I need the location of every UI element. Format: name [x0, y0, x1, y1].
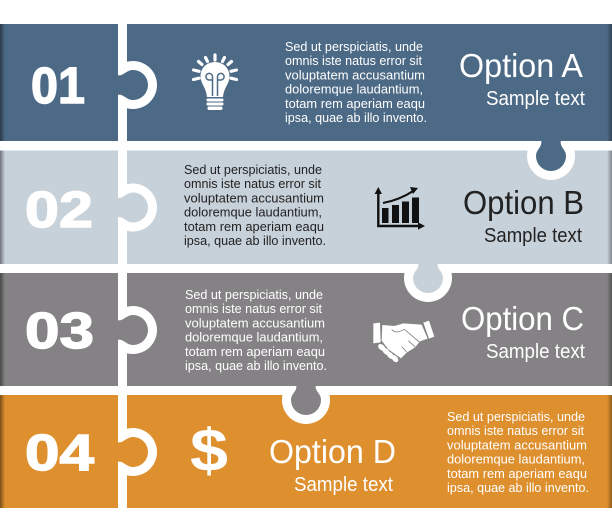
text block D: totam rem aperiam eaqu	[447, 467, 587, 481]
text block C: ipsa, quae ab illo invento.	[185, 359, 327, 373]
text block C	[185, 288, 327, 373]
text block D: omnis iste natus error sit	[447, 424, 584, 438]
subheading: Sample text: Sample text	[486, 340, 585, 363]
content cell A	[127, 24, 612, 141]
puzzle connector down to row 02	[527, 141, 575, 180]
text block C: omnis iste natus error sit	[185, 302, 322, 316]
text block C: Sed ut perspiciatis, unde	[185, 288, 323, 302]
heading: Option C: Option C	[461, 300, 584, 337]
text block A: ipsa, quae ab illo invento.	[285, 111, 427, 125]
text block C: doloremque laudantium,	[185, 331, 323, 345]
puzzle connector down to row 03	[404, 264, 452, 302]
puzzle connector 04	[118, 428, 157, 476]
text block B	[184, 163, 326, 248]
puzzle connector 01	[118, 61, 157, 109]
text block B: voluptatem accusantium	[184, 191, 324, 205]
number 01: 01	[31, 57, 85, 114]
text block D	[447, 410, 589, 495]
text block C: voluptatem accusantium	[185, 316, 325, 330]
content cell B	[127, 150, 612, 264]
subheading: Sample text: Sample text	[486, 87, 585, 110]
text block C: totam rem aperiam eaqu	[185, 345, 325, 359]
number cell 03	[0, 273, 118, 386]
text block D: voluptatem accusantium	[447, 438, 587, 452]
panel: row 04 Option D	[0, 395, 612, 508]
text block A	[285, 40, 427, 125]
icon: bar chart with trend arrow	[375, 187, 425, 230]
heading: Option B: Option B	[463, 184, 584, 221]
icon: dollar sign: $	[190, 417, 228, 484]
panel: row 03 Option C	[0, 273, 612, 424]
puzzle connector 03	[118, 306, 157, 354]
text block B: omnis iste natus error sit	[184, 177, 321, 191]
text block D: Sed ut perspiciatis, unde	[447, 410, 585, 424]
text block A: Sed ut perspiciatis, unde	[285, 40, 423, 54]
text block B: doloremque laudantium,	[184, 206, 322, 220]
text block A: totam rem aperiam eaqu	[285, 97, 425, 111]
text block B: ipsa, quae ab illo invento.	[184, 234, 326, 248]
icon: handshake	[373, 321, 434, 363]
number cell 02	[0, 150, 118, 264]
text block D: ipsa, quae ab illo invento.	[447, 481, 589, 495]
text block A: voluptatem accusantium	[285, 68, 425, 82]
number 04: 04	[25, 424, 95, 481]
text block B: Sed ut perspiciatis, unde	[184, 163, 322, 177]
subheading: Sample text: Sample text	[294, 473, 393, 496]
puzzle connector down to row 04	[282, 386, 330, 424]
number 03: 03	[25, 302, 94, 359]
text block D: doloremque laudantium,	[447, 453, 585, 467]
number 02: 02	[25, 181, 93, 238]
icon: light bulb	[194, 55, 236, 110]
heading: Option D: Option D	[269, 433, 396, 470]
content cell C	[127, 273, 612, 386]
heading: Option A: Option A	[459, 47, 583, 84]
number cell 04	[0, 395, 118, 508]
text block A: omnis iste natus error sit	[285, 54, 422, 68]
subheading: Sample text: Sample text	[484, 224, 582, 247]
content cell D	[127, 395, 612, 508]
text block A: doloremque laudantium,	[285, 83, 423, 97]
panel: row 01 Option A	[0, 24, 612, 180]
puzzle connector 02	[118, 184, 157, 232]
number cell 01	[0, 24, 118, 141]
panel: row 02 Option B	[0, 150, 612, 302]
text block B: totam rem aperiam eaqu	[184, 220, 324, 234]
